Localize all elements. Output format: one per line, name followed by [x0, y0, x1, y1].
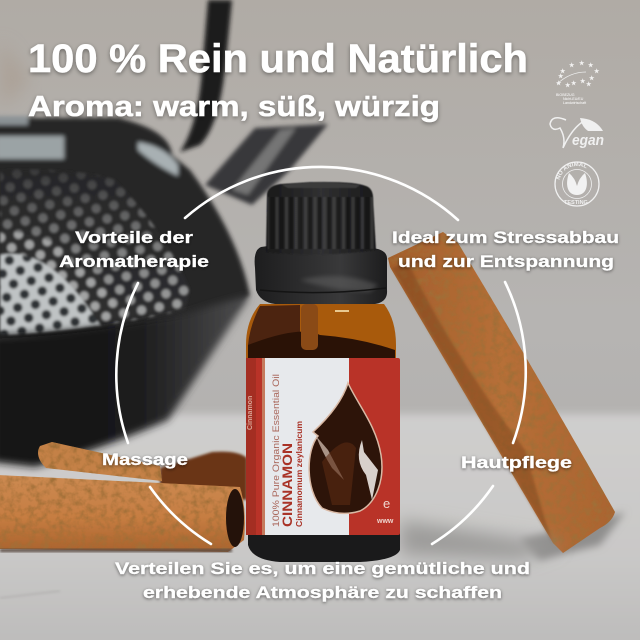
- label: Vorteile der Aromatherapie: [59, 229, 209, 271]
- icon: EU organic leaf: ★: [594, 68, 600, 75]
- label: Massage: Massage: [102, 451, 188, 469]
- cinnamon stick: leaning right: [388, 232, 625, 560]
- label: Vorteile der Aromatherapie: Vorteile der: [75, 229, 194, 247]
- icon: EU organic leaf: [556, 60, 600, 105]
- essential oil bottle: e: [383, 496, 390, 511]
- essential oil bottle: Cinnamomum zeylanicum: [295, 421, 304, 527]
- icon: EU organic leaf: ★: [558, 73, 564, 80]
- bottle shadow: [400, 520, 560, 560]
- icon: EU organic leaf: ★: [569, 62, 575, 69]
- essential oil bottle: CINNAMON: [279, 443, 295, 527]
- red label: [246, 358, 400, 535]
- subtitle: Aroma: warm, süß, würzig: [28, 91, 440, 123]
- icon: EU organic leaf: ★: [580, 78, 586, 85]
- essential oil bottle: www: [376, 518, 394, 525]
- teapot, blurred in background: [0, 0, 328, 467]
- label: Verteilen: erhebende Atmosphäre zu schaffen: [143, 584, 502, 602]
- amber glass: [246, 304, 396, 370]
- title: 100 % Rein und Natürlich: [28, 37, 528, 81]
- icon: EU organic leaf: ★: [579, 60, 585, 67]
- label: Ideal zum Stressabbau: und zur Entspannung: [398, 253, 614, 271]
- icon: no animal testing badge: TESTING: [564, 200, 588, 206]
- side label text: Cinnamon: [247, 396, 254, 430]
- icon: EU organic leaf: Landwirtschaft: [563, 101, 586, 105]
- dark base: [248, 530, 400, 562]
- icon: EU organic leaf: ★: [588, 62, 594, 69]
- icon: Vegan logo: [550, 118, 604, 149]
- label text: 100% Pure Organic Essential Oil: [271, 374, 282, 527]
- essential oil bottle: [246, 182, 560, 562]
- icon: EU organic leaf: ★: [556, 80, 562, 87]
- icon: EU organic leaf: ★: [565, 82, 571, 89]
- label: Vorteile der Aromatherapie: Aromatherapie: [59, 253, 209, 271]
- icon: EU organic leaf: Nicht-EU/EU: [563, 97, 584, 101]
- cap skirt: [255, 243, 387, 304]
- icon: no animal testing badge: [554, 161, 600, 207]
- icon: EU organic leaf: ★: [560, 68, 566, 75]
- label: Hautpflege: Hautpflege: [461, 454, 572, 472]
- label: Ideal zum Stressabbau: Ideal zum Stressabbau: [392, 229, 619, 247]
- icon: EU organic leaf: ★: [586, 81, 592, 88]
- label droplet: [309, 383, 382, 513]
- label: Verteilen: Verteilen Sie es, um eine gemütliche und: [115, 560, 530, 578]
- circular frame arcs: [116, 167, 526, 544]
- label: Verteilen: [115, 560, 530, 602]
- icon: EU organic leaf: BIOBEZUG: [556, 93, 575, 97]
- icon: EU organic leaf: ★: [589, 75, 595, 82]
- icon: no animal testing badge: NO ANIMAL: [556, 162, 586, 180]
- icon: EU organic leaf: ★: [571, 80, 577, 87]
- ribbed cap: [266, 182, 376, 255]
- cinnamon sticks: lying left: [0, 442, 247, 552]
- icon: Vegan logo: egan: [572, 132, 604, 149]
- label: Ideal zum Stressabbau: [392, 229, 619, 271]
